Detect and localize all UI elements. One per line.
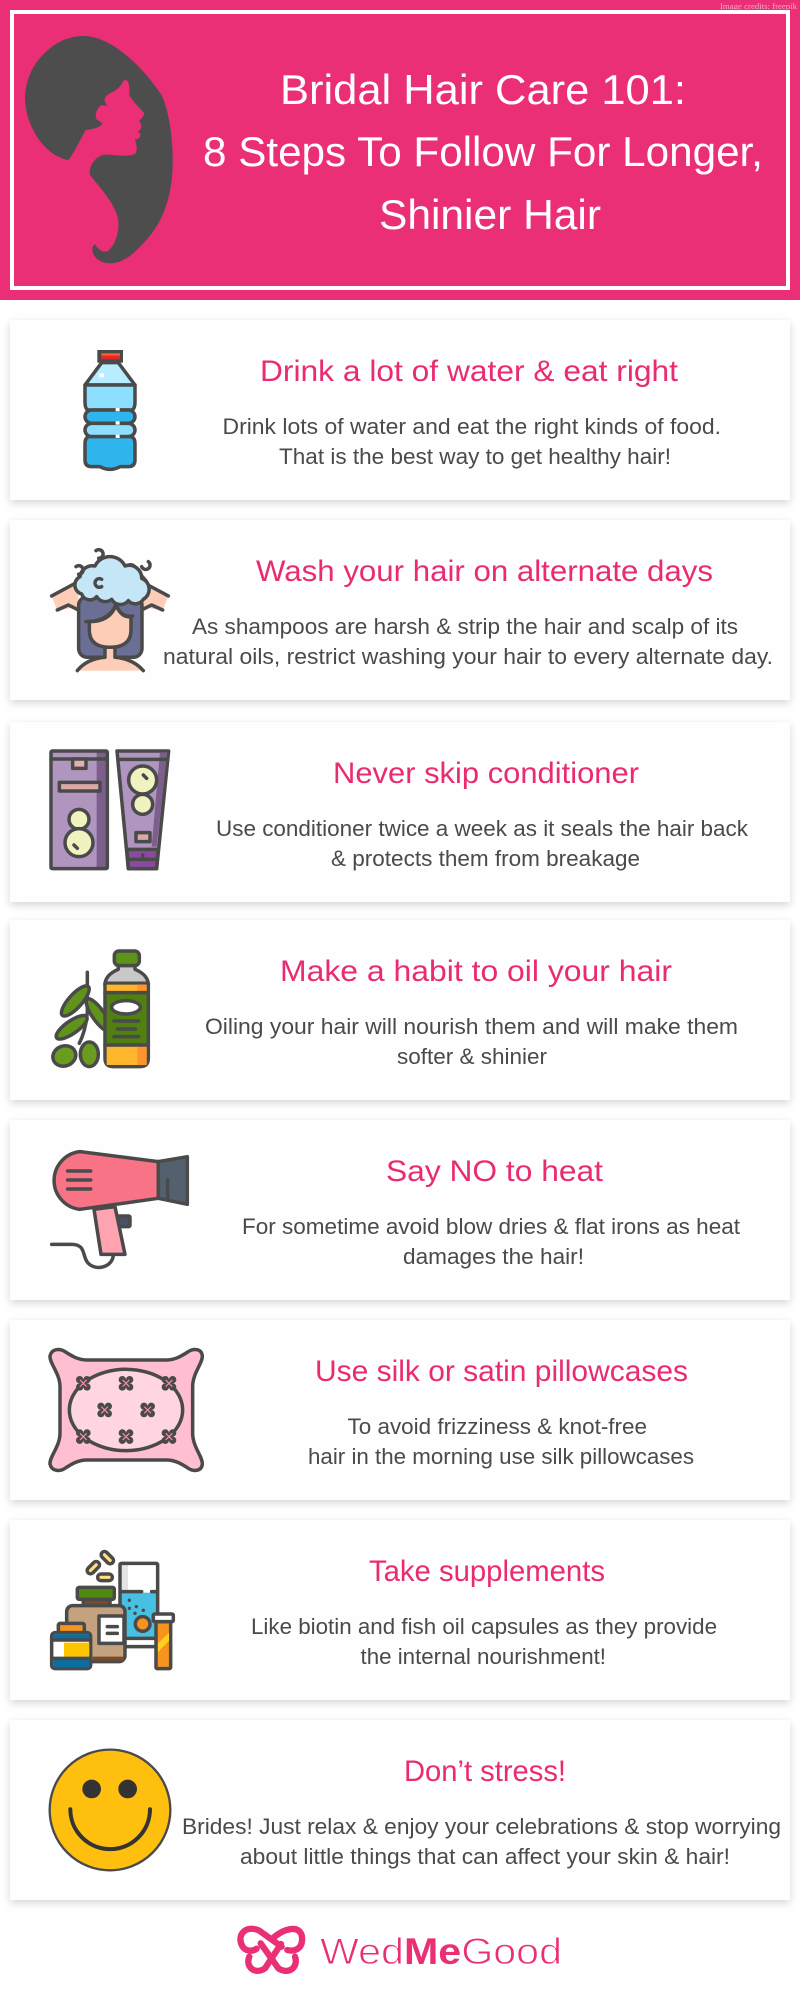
body text: the internal nourishment! — [360, 1644, 606, 1669]
icon: hair dryer — [52, 1152, 187, 1267]
icon: smiley face — [50, 1750, 170, 1870]
body text — [251, 1614, 717, 1669]
icon: conditioner bottles — [51, 751, 169, 869]
body text — [308, 1414, 694, 1469]
icon: woman washing hair — [52, 550, 168, 671]
body text — [182, 1814, 781, 1869]
header banner — [0, 0, 800, 300]
heading: Take supplements — [369, 1555, 605, 1588]
body text: Use conditioner twice a week as it seals the hair back — [216, 816, 749, 841]
heading: Wash your hair on alternate days — [256, 555, 713, 588]
body text: softer & shinier — [397, 1044, 547, 1069]
heading: Never skip conditioner — [333, 757, 639, 790]
heading: Make a habit to oil your hair — [280, 955, 672, 988]
body text: That is the best way to get healthy hair! — [279, 444, 671, 469]
body text — [242, 1214, 740, 1269]
icon: pillow — [50, 1350, 202, 1470]
title: Shinier Hair — [379, 191, 601, 238]
body text: For sometime avoid blow dries & flat irons as heat — [242, 1214, 740, 1239]
icon: water bottle — [85, 350, 135, 469]
body text — [222, 414, 721, 469]
body text: Drink lots of water and eat the right kinds of food. — [222, 414, 721, 439]
body text: Like biotin and fish oil capsules as they provide — [251, 1614, 717, 1639]
icon: oil bottle and olive branch — [50, 951, 148, 1069]
title: Bridal Hair Care 101: — [280, 66, 686, 113]
panel: wash hair — [10, 520, 790, 700]
panel: oil hair — [10, 920, 790, 1100]
body text: To avoid frizziness & knot-free — [348, 1414, 647, 1439]
wordmark: WedMeGood — [320, 1931, 562, 1972]
body text: As shampoos are harsh & strip the hair and scalp of its — [192, 614, 738, 639]
panel: supplements — [10, 1520, 790, 1700]
icon: butterfly knot — [240, 1929, 302, 1971]
body text: Brides! Just relax & enjoy your celebrations & stop worrying — [182, 1814, 781, 1839]
body text — [205, 1014, 738, 1069]
heading: Use silk or satin pillowcases — [315, 1355, 688, 1388]
heading: Don’t stress! — [404, 1755, 566, 1788]
panel: drink water — [10, 320, 790, 500]
title: 8 Steps To Follow For Longer, — [203, 128, 763, 175]
body text: about little things that can affect your skin & hair! — [240, 1844, 730, 1869]
panel: don't stress — [10, 1720, 790, 1900]
body text: natural oils, restrict washing your hair to every alternate day. — [163, 644, 773, 669]
body text: & protects them from breakage — [331, 846, 640, 871]
panel: conditioner — [10, 722, 790, 902]
heading: Drink a lot of water & eat right — [260, 355, 679, 388]
body text: hair in the morning use silk pillowcases — [308, 1444, 694, 1469]
body text — [163, 614, 773, 669]
logo: WedMeGood — [237, 1926, 562, 1974]
body text: damages the hair! — [403, 1244, 584, 1269]
heading: Say NO to heat — [386, 1155, 604, 1188]
panel: silk pillowcases — [10, 1320, 790, 1500]
body text: Oiling your hair will nourish them and will make them — [205, 1014, 738, 1039]
panel: no heat — [10, 1120, 790, 1300]
icon: supplement jars and glass — [52, 1550, 173, 1669]
body text — [216, 816, 749, 871]
title — [203, 66, 763, 238]
icon: woman silhouette with long hair — [25, 36, 173, 263]
image credit: Image credits: freepik — [720, 1, 798, 11]
